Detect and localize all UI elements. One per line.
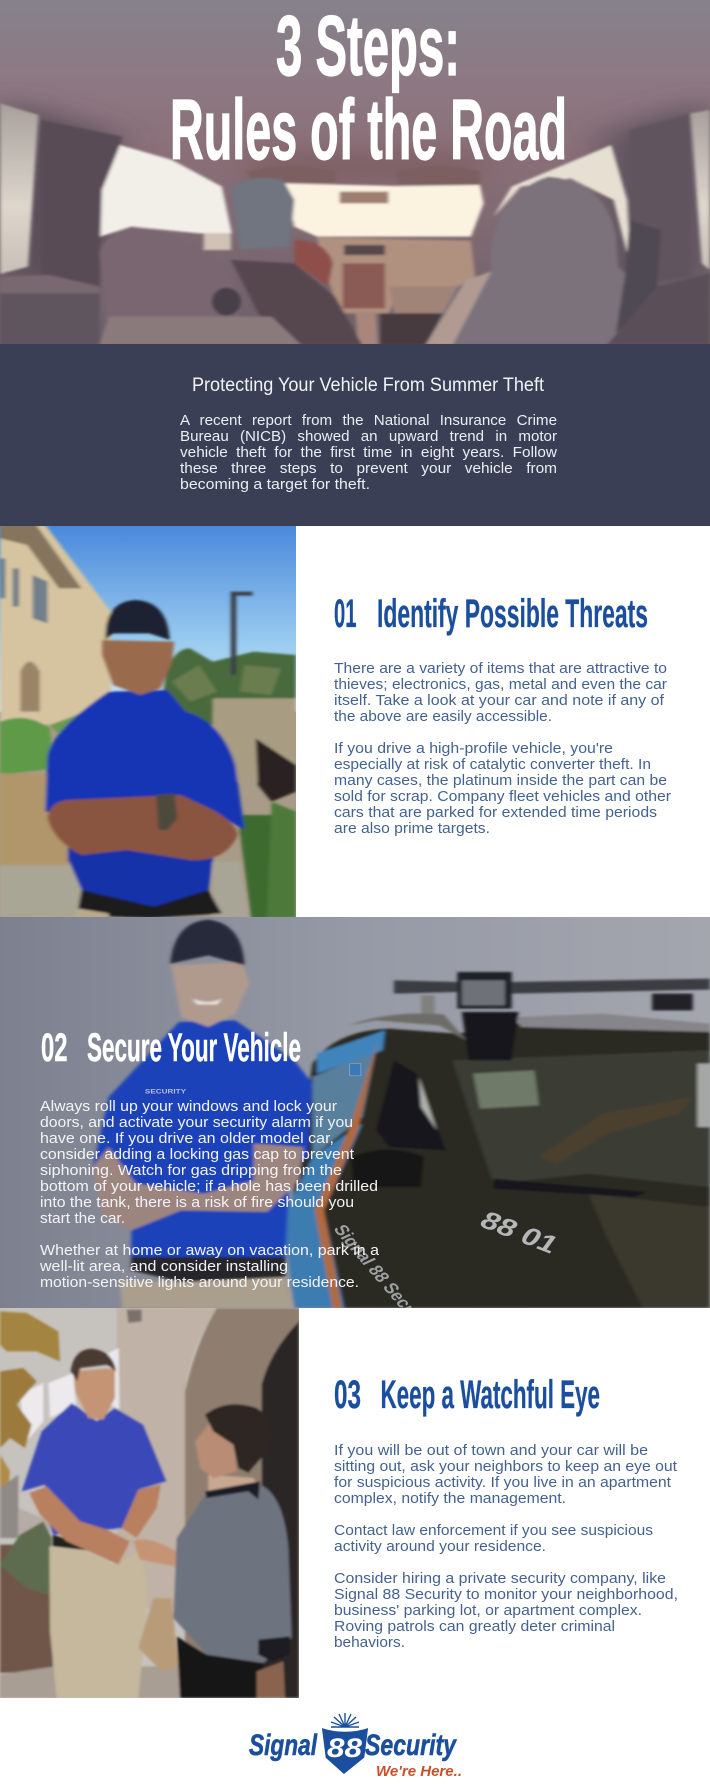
text: step 3 body: behaviors. <box>334 1634 405 1651</box>
heading: step 2: 02 <box>41 1026 68 1070</box>
text: step 3 body: Contact law enforcement if you see suspicious <box>334 1522 653 1539</box>
intro paragraph: becoming a target for theft. <box>180 476 370 493</box>
text: step 2 body: into the tank, there is a risk of fire should you <box>40 1194 354 1211</box>
shield number: 88 <box>327 1733 362 1763</box>
text: step 3 body: Consider hiring a private security company, like <box>334 1570 666 1587</box>
text: step 1 body: itself. Take a look at your car and note if any of <box>334 692 665 709</box>
panel: header photo of car interior <box>0 0 710 345</box>
text: step 3 body: activity around your residence. <box>334 1538 546 1555</box>
intro paragraph: Bureau (NICB) showed an upward trend in motor <box>180 428 557 445</box>
text: step 2 body: have one. If you drive an older model car, <box>40 1130 334 1147</box>
panel: intro band <box>0 344 710 526</box>
car number decal: 88 01 <box>474 1207 564 1259</box>
tagline: We're Here.. <box>376 1763 462 1780</box>
text: step 3 body: Signal 88 Security to monitor your neighborhood, <box>334 1586 678 1603</box>
text: step 2 body: Always roll up your windows and lock your <box>40 1098 337 1115</box>
text: step 1 body: thieves; electronics, gas, metal and even the car <box>334 676 667 693</box>
shirt text: SECURITY <box>145 1089 186 1095</box>
text: step 2 body <box>39 1098 380 1291</box>
photo: guard beside patrol vehicle <box>0 917 710 1338</box>
text: step 3 body: business' parking lot, or apartment complex. <box>334 1602 642 1619</box>
text: step 1 body: cars that are parked for extended time periods <box>334 804 657 821</box>
text: step 1 body <box>334 660 671 837</box>
text: step 1 body: There are a variety of items that are attractive to <box>334 660 667 677</box>
text: step 2 body: doors, and activate your security alarm if you <box>40 1114 353 1131</box>
text: step 2 body: Whether at home or away on vacation, park in a <box>40 1242 380 1259</box>
text: step 3 body: sitting out, ask your neighbors to keep an eye out <box>334 1458 678 1475</box>
text: step 3 body: If you will be out of town and your car will be <box>334 1442 648 1459</box>
intro paragraph: these three steps to prevent your vehicle from <box>180 460 557 477</box>
photo: guard in front of building <box>0 526 296 917</box>
text: step 1 body: If you drive a high-profile vehicle, you're <box>334 740 613 757</box>
panel: step 2 <box>0 917 710 1338</box>
logo: Signal 88 Security <box>249 1713 462 1780</box>
subtitle: Protecting Your Vehicle From Summer Theft <box>192 375 545 396</box>
heading: step 3: 03 <box>334 1373 361 1417</box>
title <box>170 0 567 178</box>
text: step 1 body: sold for scrap. Company fleet vehicles and other <box>334 788 671 805</box>
intro paragraph: vehicle theft for the first time in eight years. Follow <box>180 444 557 461</box>
text: step 3 body: for suspicious activity. If you live in an apartment <box>334 1474 672 1491</box>
photo: guard talking with resident <box>0 1308 299 1698</box>
text: step 2 body: start the car. <box>40 1210 125 1227</box>
small marker icon <box>350 1064 361 1076</box>
door decal: Signal 88 Security <box>329 1222 439 1338</box>
text: step 2 body: motion-sensitive lights around your residence. <box>40 1274 359 1291</box>
text: step 2 body: bottom of your vehicle; if a hole has been drilled <box>40 1178 378 1195</box>
panel: step 3 <box>0 1308 710 1698</box>
heading: step 2: Secure Your Vehicle <box>87 1026 301 1070</box>
icon: sunburst <box>331 1713 359 1727</box>
intro paragraph: A recent report from the National Insurance Crime <box>180 412 557 429</box>
icon: shield <box>321 1727 369 1775</box>
wordmark left: Signal <box>249 1729 318 1762</box>
text: step 1 body: many cases, the platinum inside the part can be <box>334 772 667 789</box>
text: step 1 body: especially at risk of catalytic converter theft. In <box>334 756 651 773</box>
text: step 1 body: are also prime targets. <box>334 820 490 837</box>
heading: step 1: 01 <box>334 592 356 636</box>
text: step 2 body: siphoning. Watch for gas dripping from the <box>40 1162 342 1179</box>
text: step 3 body: complex, notify the management. <box>334 1490 566 1507</box>
text: step 2 body: well-lit area, and consider installing <box>39 1258 288 1275</box>
text: step 3 body: Roving patrols can greatly deter criminal <box>334 1618 615 1635</box>
text: step 1 body: the above are easily accessible. <box>334 708 552 725</box>
heading: step 3 <box>334 1373 600 1417</box>
title: 3 Steps: <box>276 0 460 94</box>
text: step 3 body <box>334 1442 678 1651</box>
intro paragraph <box>180 412 557 493</box>
heading: step 2 <box>41 1026 301 1070</box>
panel: step 1 <box>0 525 710 918</box>
text: step 2 body: consider adding a locking gas cap to prevent <box>40 1146 355 1163</box>
wordmark right: Security <box>365 1729 457 1762</box>
